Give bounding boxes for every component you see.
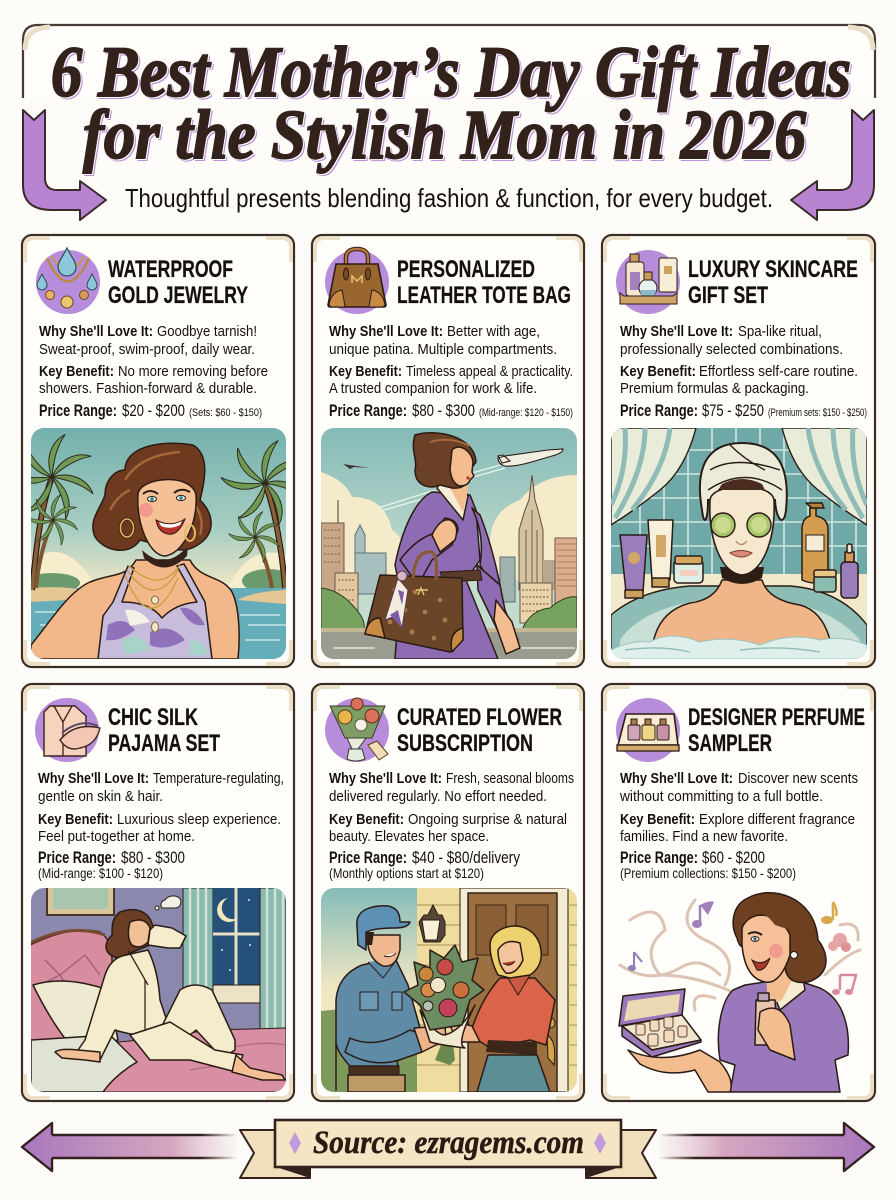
panel: chic silk pajama set bbox=[22, 684, 294, 1101]
heading: SUBSCRIPTION bbox=[397, 730, 533, 757]
text block: A trusted companion for work & life. bbox=[329, 380, 537, 397]
arrow: header right bbox=[791, 110, 874, 220]
text block: $40 - $80/delivery bbox=[412, 849, 521, 867]
text block: Key Benefit: bbox=[329, 363, 402, 380]
text block: Why She'll Love It: bbox=[329, 323, 443, 340]
text block: Ongoing surprise & natural bbox=[408, 811, 567, 828]
panel: curated flower subscription bbox=[312, 684, 584, 1101]
text block: $80 - $300 bbox=[121, 849, 185, 867]
text block bbox=[329, 323, 573, 420]
arrow: header left bbox=[23, 110, 106, 220]
text block: Key Benefit: bbox=[39, 363, 114, 380]
heading: WATERPROOF bbox=[108, 256, 233, 283]
icon: gold necklaces and water drops bbox=[36, 248, 100, 314]
text block: Price Range: bbox=[38, 849, 116, 867]
icon: skincare tray bbox=[616, 250, 680, 314]
text block: (Sets: $60 - $150) bbox=[189, 407, 262, 419]
text block: Price Range: bbox=[620, 849, 698, 867]
text block: without committing to a full bottle. bbox=[619, 788, 823, 805]
heading bbox=[397, 704, 562, 757]
text block: Timeless appeal & practicality. bbox=[406, 363, 573, 380]
illustration: woman with perfume sampler bbox=[619, 893, 860, 1092]
panel: waterproof gold jewelry bbox=[6, 235, 309, 667]
text block: Key Benefit: bbox=[329, 811, 404, 828]
text block: (Monthly options start at $120) bbox=[329, 865, 484, 881]
heading bbox=[397, 256, 571, 309]
text block: Key Benefit: bbox=[38, 811, 113, 828]
illustration: woman in silk pajamas on bed bbox=[30, 880, 286, 1092]
illustration: flower delivery at door bbox=[321, 888, 577, 1092]
text block: Discover new scents bbox=[738, 770, 858, 787]
icon: bouquet with tag bbox=[325, 698, 389, 762]
arrow: footer right bbox=[659, 1123, 874, 1171]
heading: GOLD JEWELRY bbox=[108, 282, 248, 309]
text block: Spa-like ritual, bbox=[738, 323, 822, 340]
heading bbox=[108, 704, 220, 757]
text block: Effortless self-care routine. bbox=[699, 363, 858, 380]
text block: gentle on skin & hair. bbox=[38, 788, 163, 805]
text block: Key Benefit: bbox=[620, 363, 696, 380]
text block: (Mid-range: $100 - $120) bbox=[38, 865, 163, 881]
text block: professionally selected combinations. bbox=[620, 341, 843, 358]
heading: PERSONALIZED bbox=[397, 256, 535, 283]
header frame bbox=[23, 25, 875, 98]
text block: No more removing before bbox=[118, 363, 268, 380]
heading bbox=[108, 256, 248, 309]
panel: luxury skincare gift set bbox=[602, 235, 875, 667]
icon: silk pajamas and eye mask bbox=[35, 698, 100, 762]
text block: Goodbye tarnish! bbox=[157, 323, 257, 340]
text block: Why She'll Love It: bbox=[38, 770, 149, 787]
text block bbox=[619, 770, 858, 881]
text block bbox=[329, 770, 574, 881]
heading: CHIC SILK bbox=[108, 704, 198, 731]
text block: Premium formulas & packaging. bbox=[620, 380, 809, 397]
title: for the Stylish Mom in 2026 bbox=[83, 97, 806, 174]
text block: Price Range: bbox=[329, 849, 407, 867]
text block bbox=[620, 323, 867, 420]
text block: Price Range: bbox=[329, 402, 407, 420]
source text: Source: ezragems.com bbox=[313, 1125, 584, 1161]
text block: Explore different fragrance bbox=[699, 811, 855, 828]
source ribbon bbox=[240, 1120, 656, 1178]
text block: Better with age, bbox=[447, 323, 540, 340]
text block: Why She'll Love It: bbox=[620, 770, 733, 787]
heading bbox=[688, 704, 865, 757]
illustration: spa face mask in bath bbox=[611, 428, 867, 659]
text block: $20 - $200 bbox=[122, 402, 185, 420]
illustration: woman with tote in the city bbox=[321, 428, 577, 659]
text block: Fresh, seasonal blooms bbox=[446, 770, 574, 787]
text block: Why She'll Love It: bbox=[329, 770, 442, 787]
text block: Price Range: bbox=[620, 402, 698, 420]
arrow: footer left bbox=[22, 1123, 237, 1171]
text block: Why She'll Love It: bbox=[39, 323, 153, 340]
text block: Sweat-proof, swim-proof, daily wear. bbox=[39, 341, 255, 358]
icon: leather bag bbox=[325, 249, 389, 314]
text block: (Mid-range: $120 - $150) bbox=[479, 407, 573, 419]
text block: unique patina. Multiple compartments. bbox=[329, 341, 557, 358]
heading bbox=[688, 256, 858, 309]
panel: designer perfume sampler bbox=[602, 684, 875, 1101]
heading: SAMPLER bbox=[688, 730, 772, 757]
panel: personalized leather tote bag bbox=[312, 235, 584, 667]
text block: $75 - $250 bbox=[702, 402, 764, 420]
subtitle: Thoughtful presents blending fashion & function, for every budget. bbox=[125, 183, 773, 213]
text block: Temperature-regulating, bbox=[153, 770, 284, 787]
text block: Luxurious sleep experience. bbox=[117, 811, 281, 828]
text block: Key Benefit: bbox=[620, 811, 695, 828]
heading: CURATED FLOWER bbox=[397, 704, 562, 731]
illustration: woman at the beach bbox=[31, 428, 286, 659]
text block: Why She'll Love It: bbox=[620, 323, 733, 340]
heading: GIFT SET bbox=[688, 282, 768, 309]
text block: Feel put-together at home. bbox=[38, 828, 195, 845]
text block: showers. Fashion-forward & durable. bbox=[39, 380, 257, 397]
text block: (Premium collections: $150 - $200) bbox=[620, 865, 796, 881]
text block: families. Find a new favorite. bbox=[620, 828, 788, 845]
text block bbox=[39, 323, 268, 420]
text block: $80 - $300 bbox=[412, 402, 475, 420]
heading: PAJAMA SET bbox=[108, 730, 220, 757]
title bbox=[51, 32, 851, 174]
icon: perfume box bbox=[616, 698, 680, 762]
text block: $60 - $200 bbox=[702, 849, 765, 867]
text block bbox=[38, 770, 284, 881]
heading: LEATHER TOTE BAG bbox=[397, 282, 571, 309]
text block: beauty. Elevates her space. bbox=[329, 828, 489, 845]
text block: Price Range: bbox=[39, 402, 117, 420]
text block: delivered regularly. No effort needed. bbox=[329, 788, 547, 805]
